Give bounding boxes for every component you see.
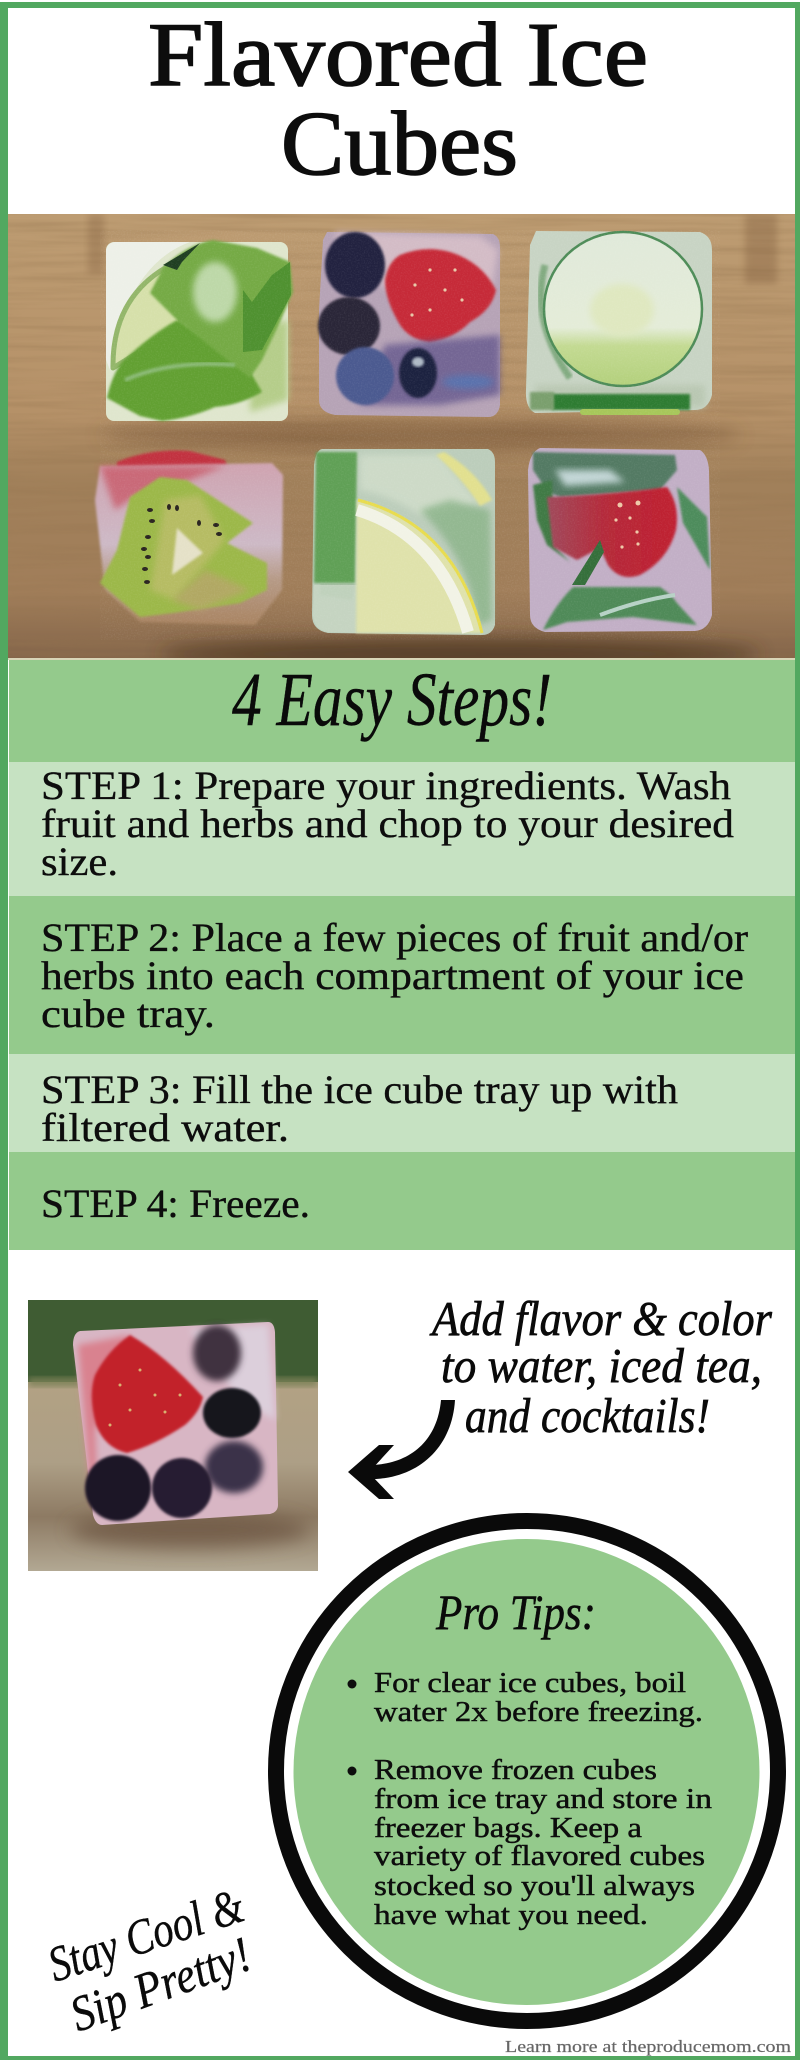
slogan: Stay Cool and Sip Pretty: Sip Pretty!: [63, 1925, 258, 2042]
panel: pro tips circle: freezer bags. Keep a: [374, 1813, 643, 1844]
panel: pro tips circle: have what you need.: [374, 1900, 648, 1931]
callout text: to water, iced tea,: [441, 1338, 762, 1393]
step 1: fruit and herbs and chop to your desired: [41, 801, 734, 846]
steps heading band: 4 Easy Steps!: [232, 658, 552, 742]
arrow pointing to cube photo: [348, 1400, 455, 1499]
cube: lime and lemon: [312, 449, 495, 635]
title: [148, 4, 648, 194]
slogan: Stay Cool and Sip Pretty: [41, 1877, 258, 2042]
callout text: and cocktails!: [465, 1388, 710, 1443]
step 2: STEP 2: Place a few pieces of fruit and/or: [41, 915, 748, 960]
shadows under cubes: [100, 419, 740, 451]
step 4: [9, 1152, 795, 1250]
cube: strawberry and basil: [528, 448, 712, 632]
panel: pro tips circle: variety of flavored cubes: [374, 1841, 705, 1872]
steps heading band: [9, 658, 795, 762]
panel: pro tips circle: stocked so you'll always: [374, 1871, 695, 1902]
photo: berry ice cube: [28, 1300, 318, 1571]
title: Flavored Ice: [148, 4, 648, 105]
panel: pro tips circle: Remove frozen cubes: [374, 1755, 657, 1786]
step 1: STEP 1: Prepare your ingredients. Wash: [41, 763, 731, 808]
step 3: filtered water.: [41, 1105, 289, 1150]
photo: six flavored ice cubes on wood: [8, 214, 795, 670]
panel: pro tips circle: Pro Tips:: [435, 1584, 596, 1640]
cube: cucumber: [526, 231, 712, 415]
panel: pro tips circle: [276, 1521, 778, 2021]
step 2: cube tray.: [41, 991, 215, 1036]
panel: pro tips circle: For clear ice cubes, boil: [374, 1668, 686, 1699]
slogan: Stay Cool and Sip Pretty: Stay Cool &: [41, 1877, 251, 1992]
thin edge below photo: [8, 658, 795, 660]
title: Cubes: [281, 93, 518, 194]
callout text: Add flavor & color: [429, 1291, 773, 1346]
cube: mint and lime: [106, 240, 293, 421]
step 2: [9, 896, 795, 1054]
step 3: STEP 3: Fill the ice cube tray up with: [41, 1067, 678, 1112]
step 2: herbs into each compartment of your ice: [41, 953, 744, 998]
panel: pro tips circle: water 2x before freezing.: [374, 1697, 703, 1728]
cube: blueberries and strawberry: [318, 232, 500, 417]
step 3: [9, 1054, 795, 1152]
cube: kiwi and raspberry: [95, 450, 283, 625]
step 1: size.: [41, 839, 118, 884]
step 1: [9, 762, 795, 896]
step 4: STEP 4: Freeze.: [41, 1181, 310, 1226]
source credit: Learn more at theproducemom.com: [505, 2037, 791, 2056]
callout text: [429, 1291, 773, 1443]
panel: pro tips circle: from ice tray and store in: [374, 1784, 712, 1815]
